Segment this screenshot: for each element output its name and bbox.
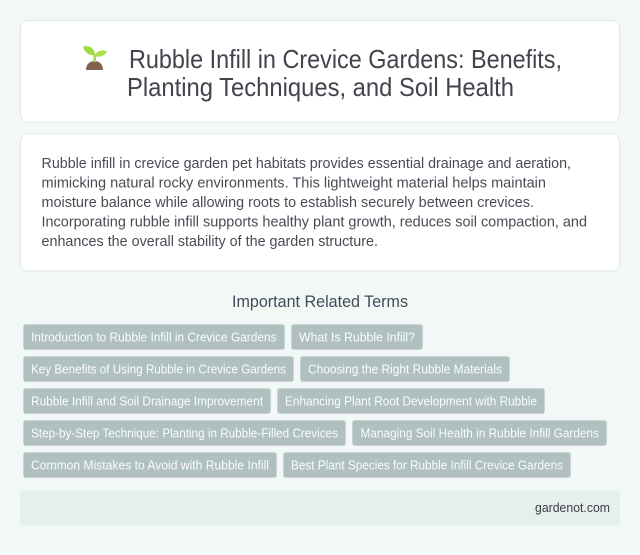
chip	[24, 324, 284, 350]
footer: gardenot.com	[535, 501, 610, 515]
chip	[300, 356, 510, 382]
footer	[20, 491, 620, 525]
chip	[278, 388, 544, 414]
chip: What Is Rubble Infill?	[299, 330, 415, 344]
chip	[24, 356, 294, 382]
chip	[284, 452, 570, 478]
panel: title card	[20, 20, 620, 122]
description text: mimicking natural rocky environments. This lightweight material helps maintain	[42, 174, 546, 192]
chip	[24, 452, 276, 478]
chip	[292, 324, 422, 350]
description text: moisture balance while allowing roots to establish securely between crevices.	[42, 194, 534, 211]
chip	[24, 420, 346, 446]
panel: related term chips	[24, 324, 606, 478]
description text: enhances the overall stability of the garden structure.	[42, 233, 378, 250]
title: Planting Techniques, and Soil Health	[127, 72, 514, 102]
description text: Rubble infill in crevice garden pet habitats provides essential drainage and aeration,	[42, 155, 571, 172]
heading: related terms: Important Related Terms	[232, 293, 408, 311]
description text: Incorporating rubble infill supports healthy plant growth, reduces soil compaction, and	[42, 214, 587, 230]
chip: Step-by-Step Technique: Planting in Rubble-Filled Crevices	[31, 426, 338, 440]
title: Rubble Infill in Crevice Gardens: Benefits,	[129, 44, 562, 74]
icon: seedling	[83, 46, 107, 70]
chip: Choosing the Right Rubble Materials	[308, 362, 502, 376]
chip: Enhancing Plant Root Development with Rubble	[285, 394, 537, 408]
chip: Best Plant Species for Rubble Infill Crevice Gardens	[291, 458, 563, 472]
chip: Rubble Infill and Soil Drainage Improvement	[31, 394, 263, 408]
chip: Key Benefits of Using Rubble in Crevice Gardens	[31, 362, 286, 376]
chip: Managing Soil Health in Rubble Infill Gardens	[360, 426, 599, 440]
chip	[24, 388, 270, 414]
description text	[42, 155, 587, 250]
chip: Common Mistakes to Avoid with Rubble Infill	[31, 458, 269, 472]
chip: Introduction to Rubble Infill in Crevice Gardens	[31, 330, 277, 344]
panel: description	[20, 134, 620, 271]
chip	[352, 420, 606, 446]
title	[127, 44, 562, 102]
